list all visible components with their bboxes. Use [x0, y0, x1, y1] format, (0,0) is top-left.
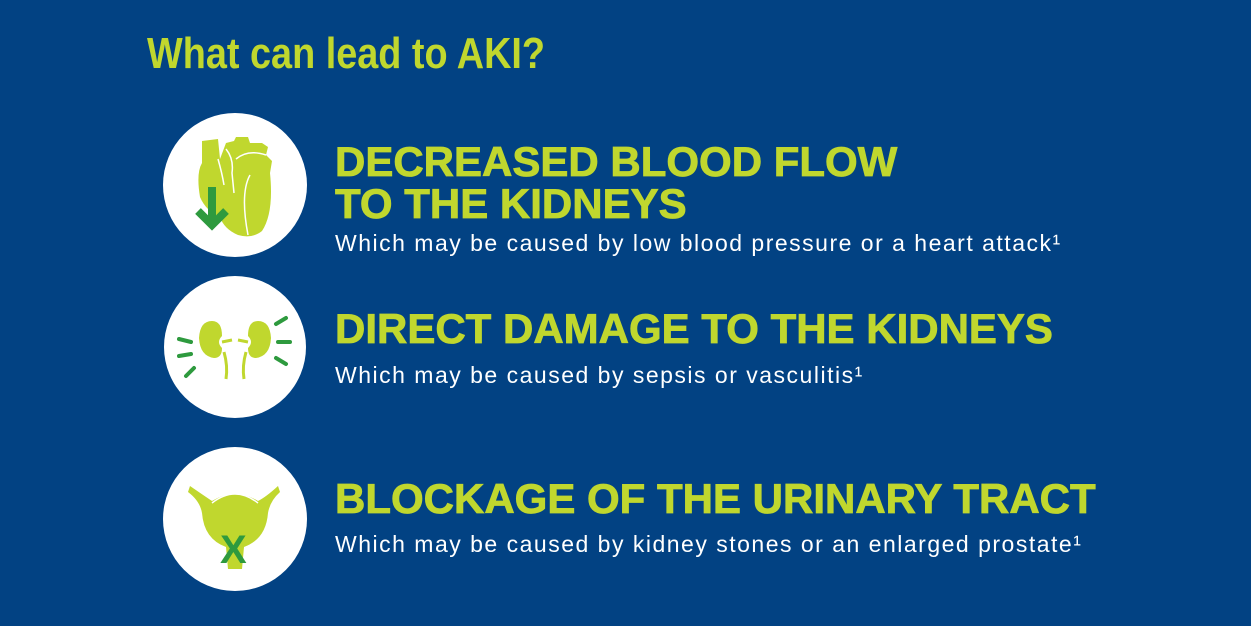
- icon: bladder: X: [220, 528, 247, 572]
- heading 1: DECREASED BLOOD FLOW: [335, 138, 897, 185]
- subtext 3: Which may be caused by kidney stones or an enlarged prostate¹: [335, 531, 1082, 557]
- icon: bladder: [163, 447, 307, 591]
- heading 1: TO THE KIDNEYS: [335, 180, 687, 227]
- heading 1: [335, 138, 898, 227]
- heading 2: DIRECT DAMAGE TO THE KIDNEYS: [335, 305, 1053, 352]
- icon: heart: [163, 113, 307, 257]
- heading 3: BLOCKAGE OF THE URINARY TRACT: [335, 475, 1096, 522]
- subtext 1: Which may be caused by low blood pressure or a heart attack¹: [335, 230, 1062, 256]
- subtext 2: Which may be caused by sepsis or vasculitis¹: [335, 362, 864, 388]
- title: What can lead to AKI?: [147, 29, 545, 78]
- icon: kidneys: [164, 276, 306, 418]
